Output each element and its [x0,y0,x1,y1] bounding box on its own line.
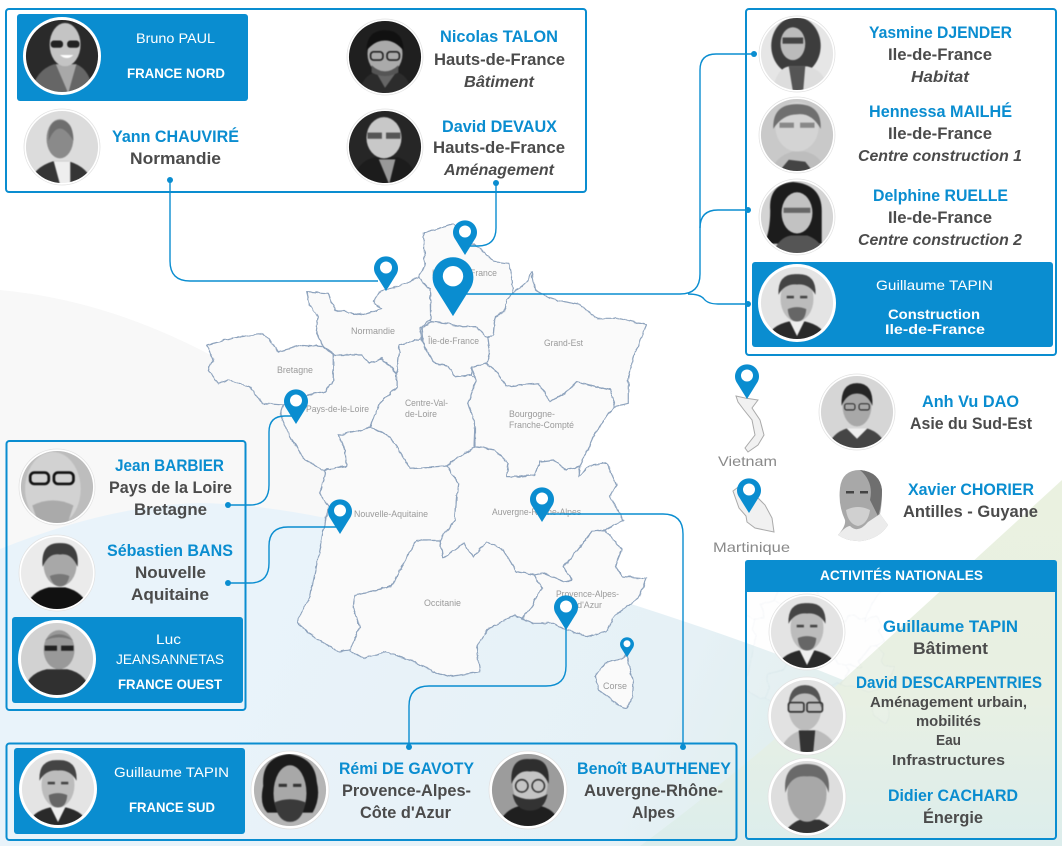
map region labels: Provence-Alpes- [556,589,619,600]
map region labels: Occitanie [424,598,461,609]
person: Jean BARBIER: Jean BARBIER [115,456,224,475]
person: Jean BARBIER: Bretagne [134,501,207,519]
person: Rémi DE GAVOTY: Côte d'Azur [360,804,452,822]
person: Xavier CHORIER: Xavier CHORIER [908,480,1034,499]
person: Guillaume TAPIN: Bâtiment [913,640,989,658]
person: Nicolas TALON: Nicolas TALON [440,27,558,46]
person: Anh Vu DAO: Anh Vu DAO [922,392,1019,411]
person: David DESCARPENTRIES: Eau [936,733,961,749]
person: Sébastien BANS: Sébastien BANS [107,541,233,560]
card: Guillaume TAPIN construction [752,262,1053,347]
map region labels: Normandie [351,326,395,337]
person: Anh Vu DAO [819,374,1032,450]
map region labels: Côte d'Azur [556,600,602,611]
connector: Benoît BAUTHENEY to Auvergne-Rhône-Alpes [545,514,686,750]
connector: Yann CHAUVIRÉ to Normandie [167,177,378,281]
person: David DESCARPENTRIES: Aménagement urbain, [870,695,1027,711]
panel: France Nord [6,9,586,192]
person: Yasmine DJENDER [759,16,1012,92]
person: Hennessa MAILHÉ [759,97,1022,173]
map region labels: Bretagne [277,365,313,376]
icon: pin Hauts-de-France [453,220,477,255]
label: Vietnam: Vietnam [718,453,777,469]
header: Activités nationales [745,560,1057,592]
connector: David DEVAUX to Hauts-de-France [470,180,499,246]
person: David DESCARPENTRIES: Infrastructures [892,753,1005,769]
person: Rémi DE GAVOTY: Provence-Alpes- [342,782,471,800]
map region labels: Auvergne-Rhône-Alpes [492,507,581,518]
person: David DESCARPENTRIES: mobilités [916,714,981,730]
portrait: Bruno PAUL [23,17,101,95]
map region labels: Nouvelle-Aquitaine [354,509,428,520]
portrait: Guillaume TAPIN [19,750,97,828]
person: Delphine RUELLE [759,179,1022,255]
card: Guillaume TAPIN construction: Construction [888,306,980,322]
map of France [207,224,647,708]
person: Benoît BAUTHENEY: Alpes [632,804,675,822]
icon: pin Martinique [737,478,761,513]
portrait: Luc JEANSANNETAS [18,620,96,698]
panel: Activités nationales [745,560,1057,840]
person: Hennessa MAILHÉ: Ile-de-France [888,125,992,143]
person: Guillaume TAPIN: Guillaume TAPIN [883,617,1018,636]
map region labels: Île-de-France [427,336,479,347]
card: Guillaume TAPIN construction: Guillaume TAPIN [876,277,993,293]
person: Hennessa MAILHÉ: Hennessa MAILHÉ [869,102,1012,121]
person: Nicolas TALON: Hauts-de-France [434,51,565,69]
card: Luc JEANSANNETAS [12,617,243,703]
person: Yasmine DJENDER: Yasmine DJENDER [869,23,1012,42]
person: Rémi DE GAVOTY [251,751,475,829]
map: Vietnam [736,396,764,452]
icon: pin Auvergne-Rhône-Alpes [530,487,554,522]
person: Sébastien BANS [19,535,233,611]
person: Didier CACHARD: Didier CACHARD [888,786,1018,805]
card: Guillaume TAPIN France Sud: FRANCE SUD [129,799,215,815]
person: Yasmine DJENDER: Ile-de-France [888,46,992,64]
icon: pin Corse [620,637,634,657]
panel: Île-de-France [746,9,1056,355]
card: Guillaume TAPIN France Sud [14,748,245,834]
connector: Île-de-France team [466,51,757,307]
person: Yasmine DJENDER: Habitat [911,69,970,86]
person: Xavier CHORIER: Antilles - Guyane [903,503,1038,521]
person: Benoît BAUTHENEY: Auvergne-Rhône- [584,782,723,800]
map region labels: Grand-Est [544,338,583,349]
card: Luc JEANSANNETAS: FRANCE OUEST [118,676,222,692]
label: Martinique: Martinique [713,539,790,555]
icon: pin Pays de la Loire [284,389,308,424]
card: Guillaume TAPIN construction: Ile-de-France [885,321,985,337]
person: Rémi DE GAVOTY: Rémi DE GAVOTY [339,759,475,778]
map region labels: Corse [603,681,627,692]
panel: France Sud [6,744,736,840]
person: Nicolas TALON [347,19,565,95]
person: Sébastien BANS: Aquitaine [131,586,209,604]
card: Bruno PAUL [17,14,248,101]
icon: pin Vietnam [735,364,759,399]
map region labels: Pays-de-le-Loire [306,404,369,415]
person: Didier CACHARD [768,758,1018,836]
person: Delphine RUELLE: Ile-de-France [888,209,992,227]
map region labels: Bourgogne- [509,409,555,420]
person: Sébastien BANS: Nouvelle [135,564,206,582]
map region labels [277,268,627,692]
map region labels: Centre-Val- [405,398,448,409]
person: David DESCARPENTRIES: David DESCARPENTRIES [856,673,1042,692]
person: Yann CHAUVIRÉ: Normandie [130,150,221,168]
person: David DEVAUX: Hauts-de-France [433,139,565,157]
icon: pin Provence-Alpes-Côte d'Azur [554,595,578,630]
panel: Vietnam and Asie du Sud-Est [718,374,1032,469]
card: Luc JEANSANNETAS: Luc [156,631,181,647]
connector: Rémi DE GAVOTY to PACA [406,628,566,750]
map region labels: Hauts-de-France [432,268,497,279]
connector: Sébastien BANS to Nouvelle-Aquitaine [225,527,340,586]
map region labels: de-Loire [405,409,437,420]
person: David DEVAUX: David DEVAUX [442,117,558,136]
person: Benoît BAUTHENEY: Benoît BAUTHENEY [577,759,732,778]
person: Xavier CHORIER [838,470,1038,541]
person: David DEVAUX: Aménagement [443,162,555,179]
person: Guillaume TAPIN [769,594,1018,670]
person: Delphine RUELLE: Centre construction 2 [858,232,1022,249]
person: David DEVAUX [347,109,565,185]
person: Delphine RUELLE: Delphine RUELLE [873,186,1008,205]
card: Guillaume TAPIN France Sud: Guillaume TAPIN [114,764,229,780]
card: Bruno PAUL: FRANCE NORD [127,65,225,81]
person: Jean BARBIER [19,449,232,526]
person: Anh Vu DAO: Asie du Sud-Est [910,415,1032,433]
connector: Jean BARBIER to Pays de la Loire [225,416,292,508]
person: Benoît BAUTHENEY [489,751,732,829]
panel: France Ouest [6,441,246,710]
portrait: Guillaume TAPIN [758,264,836,342]
map region labels: Franche-Compté [509,420,574,431]
card: Luc JEANSANNETAS: JEANSANNETAS [116,651,224,667]
person: Yann CHAUVIRÉ [24,109,239,185]
icon: pin Île-de-France [433,257,473,316]
map: Martinique [733,482,774,532]
person: Didier CACHARD: Énergie [923,808,983,827]
header: Activités nationales: ACTIVITÉS NATIONALES [820,567,983,583]
person: Nicolas TALON: Bâtiment [464,74,535,91]
person: Hennessa MAILHÉ: Centre construction 1 [858,148,1022,165]
panel: Martinique and Antilles - Guyane [713,470,1038,555]
person: Yann CHAUVIRÉ: Yann CHAUVIRÉ [112,127,239,146]
icon: pin Normandie [374,256,398,291]
person: Jean BARBIER: Pays de la Loire [109,479,232,497]
icon: pin Nouvelle-Aquitaine [328,499,352,534]
card: Bruno PAUL: Bruno PAUL [136,30,215,46]
person: David DESCARPENTRIES [768,673,1042,769]
